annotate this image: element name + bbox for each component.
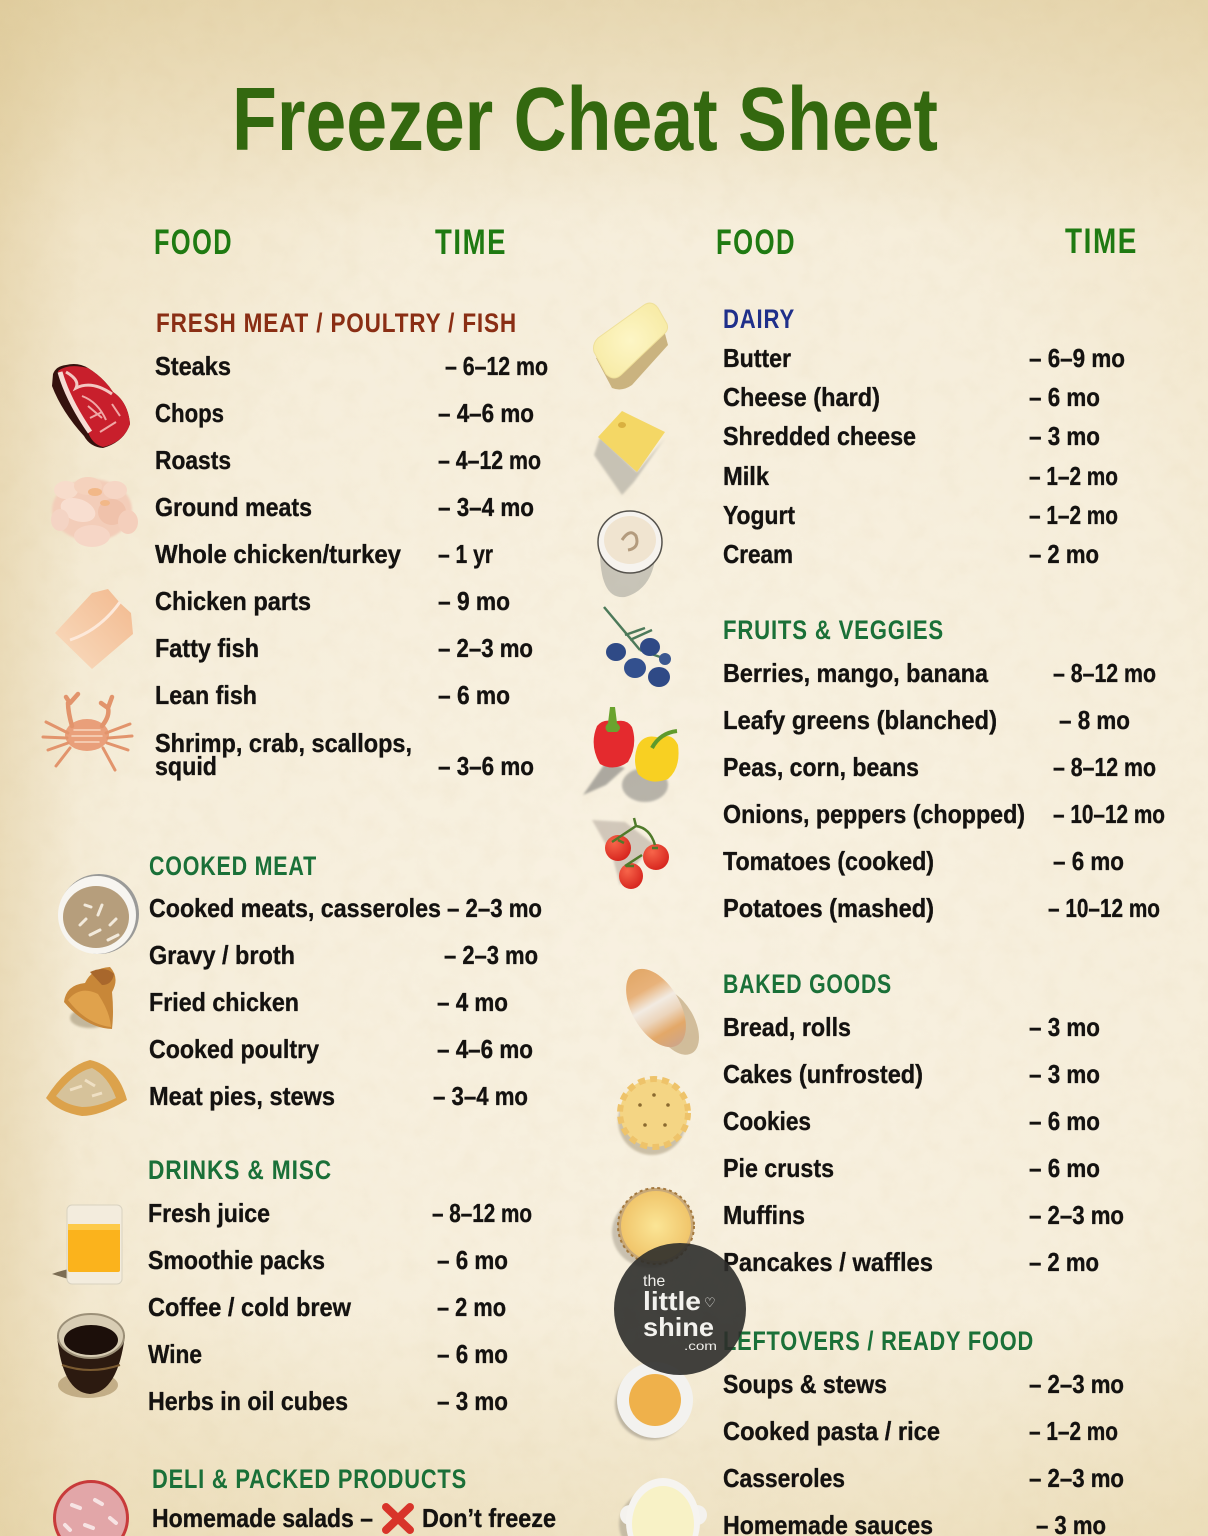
icon: crab [43, 694, 132, 770]
row: yogurt: Yogurt [723, 500, 795, 530]
row: chops: – 4–6 mo [438, 398, 534, 428]
row: butter: – 6–9 mo [1029, 343, 1125, 373]
heading: fresh meat: FRESH MEAT / POULTRY / FISH [156, 308, 517, 338]
row: herbs [148, 1386, 508, 1416]
heading: leftovers: LEFTOVERS / READY FOOD [723, 1326, 1034, 1356]
row: casseroles [723, 1463, 1124, 1493]
panel: drinks and misc [148, 1155, 532, 1416]
row: fried chicken [149, 987, 508, 1017]
row: fresh juice [148, 1198, 532, 1228]
row: homemade salads [152, 1503, 556, 1533]
icon: raw chicken chunks [51, 477, 138, 547]
row: roasts [155, 445, 541, 475]
row: soups [723, 1369, 1124, 1399]
row: fried chicken: – 4 mo [437, 987, 508, 1017]
row: peas: – 8–12 mo [1053, 752, 1156, 782]
row: shellfish: – 3–6 mo [438, 751, 534, 781]
row: cooked poultry [149, 1034, 533, 1064]
row: fatty fish [155, 633, 533, 663]
icon: muffin [612, 1188, 694, 1268]
row: soups: – 2–3 mo [1029, 1369, 1124, 1399]
row: meat pies: Meat pies, stews [149, 1081, 335, 1111]
row: lean fish [155, 680, 510, 710]
row: lean fish: Lean fish [155, 680, 257, 710]
row: coffee [148, 1292, 506, 1322]
icon: bell peppers [583, 707, 679, 802]
panel: fresh meat, poultry, fish [155, 308, 548, 781]
row: herbs: – 3 mo [437, 1386, 508, 1416]
row: roasts: Roasts [155, 445, 231, 475]
row: shredded cheese: – 3 mo [1029, 421, 1100, 451]
row: muffins: – 2–3 mo [1029, 1200, 1124, 1230]
row: fried chicken: Fried chicken [149, 987, 299, 1017]
row: fresh juice: Fresh juice [148, 1198, 270, 1228]
panel: cooked meat [149, 851, 542, 1111]
heading: dairy: DAIRY [723, 304, 795, 334]
icon: fried chicken [64, 967, 116, 1029]
row: cakes: Cakes (unfrosted) [723, 1059, 923, 1089]
row: berries: Berries, mango, banana [723, 658, 988, 688]
row: butter [723, 343, 1125, 373]
row: tomatoes [723, 846, 1124, 876]
row: cooked poultry: – 4–6 mo [437, 1034, 533, 1064]
row: cooked meats: – 2–3 mo [447, 893, 542, 923]
row: lean fish: – 6 mo [438, 680, 510, 710]
panel: fruits and veggies [723, 615, 1165, 923]
row: smoothie packs: – 6 mo [437, 1245, 508, 1275]
row: fresh juice: – 8–12 mo [432, 1198, 532, 1228]
row: cookies [723, 1106, 1100, 1136]
row: peas: Peas, corn, beans [723, 752, 919, 782]
row: tomatoes: Tomatoes (cooked) [723, 846, 934, 876]
row: yogurt [723, 500, 1118, 530]
icon: soup bowl [615, 1362, 693, 1440]
icon: coffee glass [57, 1314, 125, 1398]
row: pie crusts [723, 1153, 1100, 1183]
row: chicken parts: Chicken parts [155, 586, 311, 616]
row: shredded cheese: Shredded cheese [723, 421, 916, 451]
row: hard cheese: – 6 mo [1029, 382, 1100, 412]
row: pie crusts: Pie crusts [723, 1153, 834, 1183]
icon: steak [52, 364, 130, 448]
row: potatoes: Potatoes (mashed) [723, 893, 934, 923]
row: roasts: – 4–12 mo [438, 445, 541, 475]
row: butter: Butter [723, 343, 791, 373]
column headers: FOOD [716, 223, 796, 262]
row: yogurt: – 1–2 mo [1029, 500, 1118, 530]
column headers [154, 222, 1138, 262]
icon: salami slice [53, 1480, 129, 1536]
row: cooked poultry: Cooked poultry [149, 1034, 319, 1064]
row: onions: Onions, peppers (chopped) [723, 799, 1025, 829]
row: cream: – 2 mo [1029, 539, 1099, 569]
row: sauces [723, 1510, 1106, 1536]
row: berries [723, 658, 1156, 688]
row: casseroles: Casseroles [723, 1463, 845, 1493]
row: steaks: – 6–12 mo [445, 351, 548, 381]
row: onions: – 10–12 mo [1053, 799, 1165, 829]
icon: red cross [386, 1507, 410, 1530]
row: chicken parts [155, 586, 510, 616]
row: pasta: – 1–2 mo [1029, 1416, 1118, 1446]
row: cookies: – 6 mo [1029, 1106, 1100, 1136]
column headers: TIME [435, 223, 507, 262]
row: cooked meats: Cooked meats, casseroles [149, 893, 441, 923]
icon: fish fillet [55, 589, 133, 669]
icon: gravy bowl [58, 874, 139, 954]
row: bread: Bread, rolls [723, 1012, 851, 1042]
row: gravy: Gravy / broth [149, 940, 295, 970]
heading: cooked meat: COOKED MEAT [149, 851, 317, 881]
row: ground meats: Ground meats [155, 492, 312, 522]
row: gravy [149, 940, 538, 970]
watermark badge: .com [684, 1339, 717, 1353]
row: shellfish: squid [155, 751, 217, 781]
title: Freezer Cheat Sheet [232, 70, 938, 170]
row: leafy greens: Leafy greens (blanched) [723, 705, 997, 735]
row: wine: Wine [148, 1339, 202, 1369]
row: chicken parts: – 9 mo [438, 586, 510, 616]
row: shellfish [155, 728, 534, 781]
icon: butter [594, 303, 668, 389]
column headers: FOOD [154, 223, 233, 262]
row: wine: – 6 mo [437, 1339, 508, 1369]
row: pancakes: – 2 mo [1029, 1247, 1099, 1277]
row: shellfish: Shrimp, crab, scallops, [155, 728, 412, 758]
row: cream: Cream [723, 539, 793, 569]
column headers: TIME [1065, 222, 1138, 261]
watermark badge: little [643, 1286, 701, 1316]
heading: deli: DELI & PACKED PRODUCTS [152, 1464, 467, 1494]
row: potatoes: – 10–12 mo [1048, 893, 1160, 923]
row: cakes [723, 1059, 1100, 1089]
row: bread [723, 1012, 1100, 1042]
panel: deli and packed products [152, 1464, 556, 1533]
row: pasta: Cooked pasta / rice [723, 1416, 940, 1446]
row: milk [723, 461, 1118, 491]
heading: baked goods: BAKED GOODS [723, 969, 892, 999]
row: steaks [155, 351, 548, 381]
row: pie crusts: – 6 mo [1029, 1153, 1100, 1183]
row: soups: Soups & stews [723, 1369, 887, 1399]
row: pancakes: Pancakes / waffles [723, 1247, 933, 1277]
row: fatty fish: – 2–3 mo [438, 633, 533, 663]
icon: cherry tomatoes [592, 818, 669, 889]
row: herbs: Herbs in oil cubes [148, 1386, 348, 1416]
watermark badge: the [643, 1273, 665, 1290]
row: whole chicken: Whole chicken/turkey [155, 539, 401, 569]
icon: juice glass [52, 1205, 122, 1284]
icon: cream bowl [598, 511, 662, 597]
row: homemade salads: Don’t freeze [422, 1503, 556, 1533]
icon: cracker [618, 1079, 688, 1155]
heading: fruits: FRUITS & VEGGIES [723, 615, 944, 645]
icon: sauce dish [619, 1478, 707, 1536]
row: berries: – 8–12 mo [1053, 658, 1156, 688]
row: bread: – 3 mo [1029, 1012, 1100, 1042]
row: casseroles: – 2–3 mo [1029, 1463, 1124, 1493]
panel: baked goods [723, 969, 1124, 1277]
watermark badge [614, 1243, 746, 1375]
row: ground meats [155, 492, 534, 522]
row: pancakes [723, 1247, 1099, 1277]
icon: blueberries [604, 607, 671, 687]
row: homemade salads: Homemade salads – [152, 1503, 373, 1533]
row: fatty fish: Fatty fish [155, 633, 259, 663]
icon: meat pie [46, 1060, 127, 1116]
row: coffee: – 2 mo [437, 1292, 506, 1322]
row: shredded cheese [723, 421, 1100, 451]
row: coffee: Coffee / cold brew [148, 1292, 352, 1322]
row: steaks: Steaks [155, 351, 231, 381]
row: milk: – 1–2 mo [1029, 461, 1118, 491]
row: cakes: – 3 mo [1029, 1059, 1100, 1089]
row: tomatoes: – 6 mo [1053, 846, 1124, 876]
row: cookies: Cookies [723, 1106, 811, 1136]
row: chops [155, 398, 534, 428]
row: smoothie packs: Smoothie packs [148, 1245, 325, 1275]
row: hard cheese [723, 382, 1100, 412]
row: meat pies: – 3–4 mo [433, 1081, 528, 1111]
row: smoothie packs [148, 1245, 508, 1275]
panel: dairy [723, 304, 1125, 569]
panel: leftovers and ready food [723, 1326, 1124, 1536]
icon: bread loaf [614, 959, 709, 1063]
row: meat pies [149, 1081, 528, 1111]
row: potatoes [723, 893, 1160, 923]
row: leafy greens: – 8 mo [1059, 705, 1130, 735]
watermark badge: ♡ [704, 1295, 716, 1310]
row: cream [723, 539, 1099, 569]
row: muffins: Muffins [723, 1200, 805, 1230]
row: pasta [723, 1416, 1118, 1446]
row: whole chicken: – 1 yr [438, 539, 493, 569]
icon: cheese [594, 411, 665, 495]
heading: drinks: DRINKS & MISC [148, 1155, 332, 1185]
row: muffins [723, 1200, 1124, 1230]
row: wine [148, 1339, 508, 1369]
row: chops: Chops [155, 398, 224, 428]
row: gravy: – 2–3 mo [444, 940, 538, 970]
row: milk: Milk [723, 461, 769, 491]
row: hard cheese: Cheese (hard) [723, 382, 880, 412]
row: peas [723, 752, 1156, 782]
row: ground meats: – 3–4 mo [438, 492, 534, 522]
watermark badge: shine [643, 1312, 714, 1342]
